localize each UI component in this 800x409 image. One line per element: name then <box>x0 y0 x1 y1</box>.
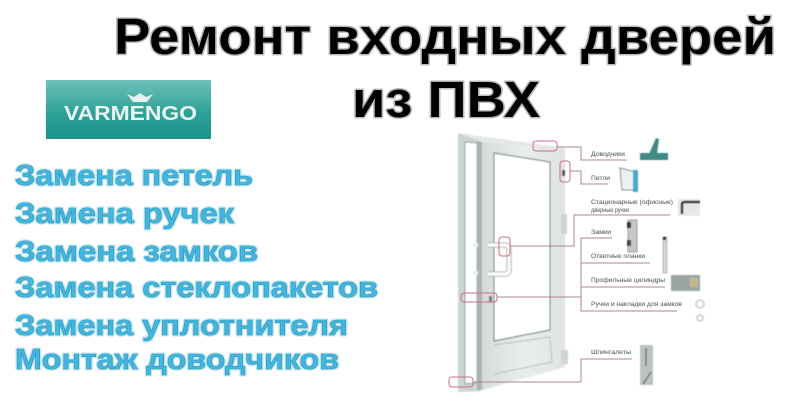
icon: office handle <box>678 199 700 216</box>
services list: Замена стеклопакетов <box>15 272 378 304</box>
services list: Замена замков <box>15 236 258 268</box>
icon: hinge <box>620 168 638 192</box>
component labels: Стационарные (офисные) <box>591 199 673 206</box>
door handles <box>488 245 509 274</box>
hinges <box>561 214 567 234</box>
services list: Монтаж доводчиков <box>15 344 339 376</box>
icon: crown <box>127 93 153 102</box>
services list <box>15 160 378 376</box>
title <box>114 8 776 128</box>
component labels <box>591 151 683 356</box>
component labels: Профильные цилиндры <box>591 277 665 284</box>
icon: lever handles <box>696 300 704 321</box>
icon: profile cylinder <box>671 275 700 291</box>
callout leader lines <box>449 141 677 387</box>
component labels: Ручки и накладки для замков <box>591 301 683 308</box>
logo: VARMENGO: VARMENGO <box>64 103 197 125</box>
component icons <box>620 138 704 385</box>
services list: Замена ручек <box>15 198 235 230</box>
services list: Замена стеклопакетов <box>15 272 378 304</box>
services list: Замена ручек <box>15 198 235 230</box>
title: из ПВХ <box>352 71 540 128</box>
icon: mortise lock <box>627 220 637 252</box>
component labels: Петли <box>591 175 610 182</box>
services list: Монтаж доводчиков <box>15 344 339 376</box>
title: из ПВХ <box>352 71 540 128</box>
component labels: Доводчики <box>591 151 625 158</box>
services list: Замена петель <box>15 160 253 192</box>
logo: VARMENGO <box>46 80 211 139</box>
component labels: дверные ручки <box>591 207 629 214</box>
door illustration <box>458 133 568 392</box>
component labels: Замки <box>591 229 611 236</box>
component labels: Ответные планки <box>591 253 645 260</box>
icon: espagnolette bolt <box>640 345 653 385</box>
services list: Замена уплотнителя <box>15 310 348 342</box>
title: Ремонт входных дверей <box>114 8 776 65</box>
services list: Замена уплотнителя <box>15 310 348 342</box>
services list: Замена замков <box>15 236 258 268</box>
component labels: Шпингалеты <box>591 349 631 356</box>
title: Ремонт входных дверей <box>114 8 776 65</box>
icon: door closer <box>640 138 668 160</box>
services list: Замена петель <box>15 160 253 192</box>
icon: strike plate <box>663 237 667 273</box>
